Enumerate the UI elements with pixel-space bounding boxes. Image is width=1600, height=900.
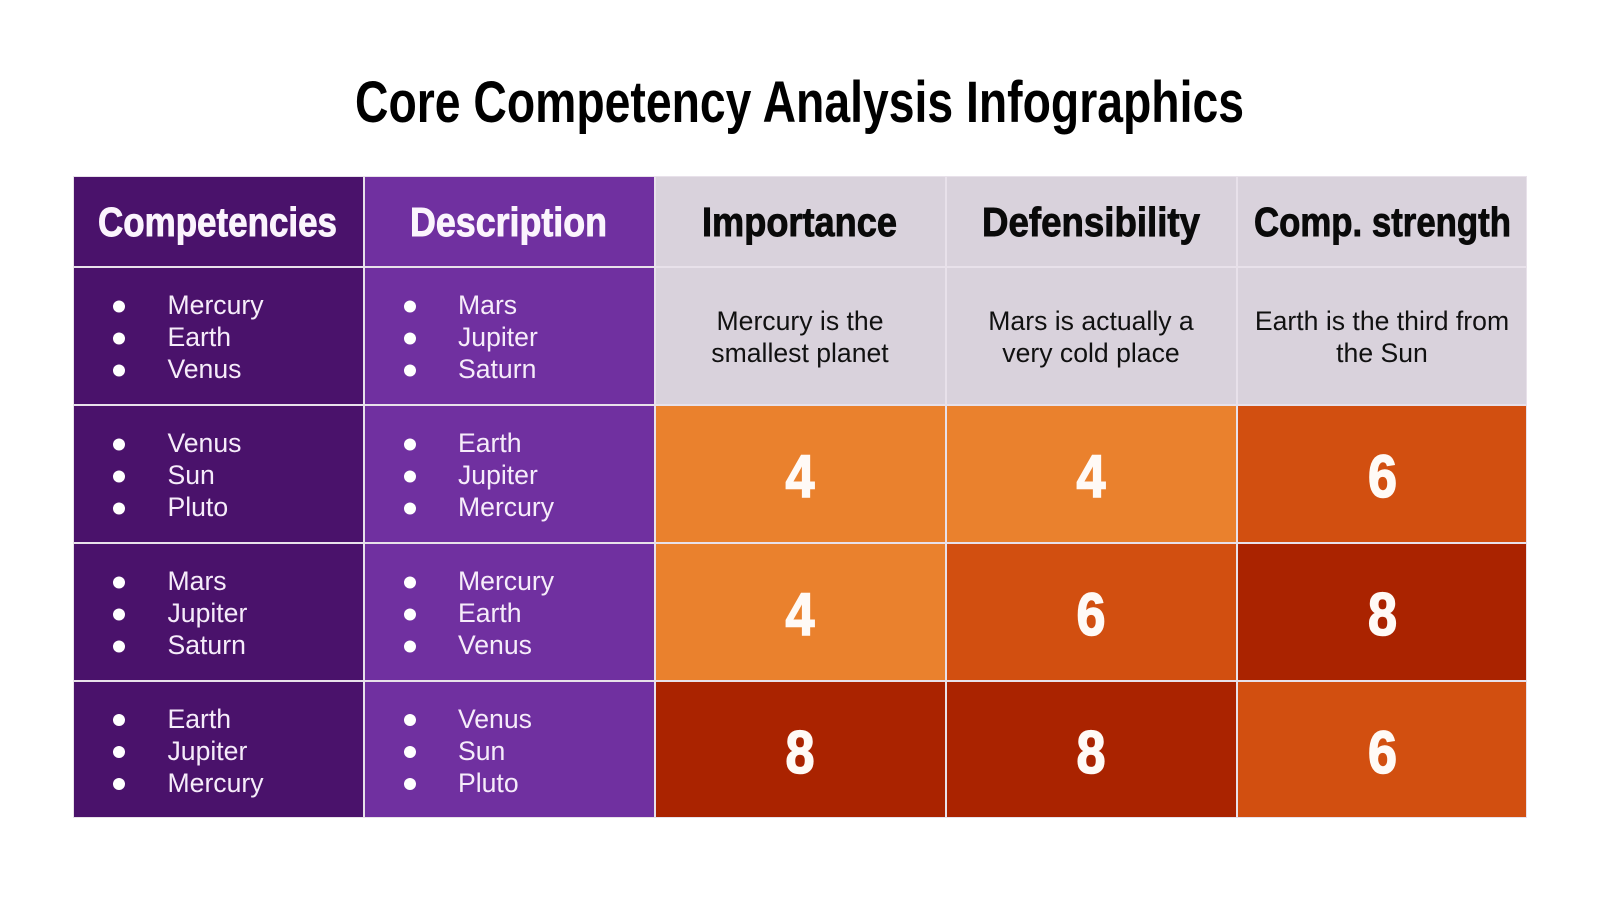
row 3 competencies list — [73, 543, 364, 681]
row 4 defensibility score — [946, 681, 1237, 818]
row 2 description list: Jupiter — [458, 460, 538, 490]
row 3 strength score — [1237, 543, 1527, 681]
row 4 importance score — [655, 681, 946, 818]
row 4 description list: Pluto — [458, 768, 519, 798]
row 1 strength text: Earth is the third from — [1255, 306, 1509, 336]
row 1 description list: Jupiter — [458, 322, 538, 352]
row 4 description list: Sun — [458, 736, 505, 766]
row 3 description list: Mercury — [458, 566, 555, 596]
row 4 description list — [364, 681, 655, 818]
row 3 competencies list: Mars — [168, 566, 227, 596]
row 3 importance score: 4 — [786, 581, 815, 648]
row 2 importance score: 4 — [786, 443, 815, 510]
row 1 importance text — [655, 267, 946, 405]
table — [72, 175, 1528, 819]
row 1 importance text: Mercury is the — [716, 306, 884, 336]
row 2 competencies list: Venus — [168, 428, 241, 458]
header: Comp. strength — [1237, 176, 1527, 267]
row 2 strength score — [1237, 405, 1527, 543]
title: Core Competency Analysis Infographics — [355, 70, 1244, 135]
row 1 description list — [364, 267, 655, 405]
row 3 defensibility score — [946, 543, 1237, 681]
row 4 strength score — [1237, 681, 1527, 818]
row 4 description list: Venus — [458, 704, 532, 734]
row 1 defensibility text: Mars is actually a — [988, 306, 1194, 336]
row 3 competencies list: Saturn — [168, 630, 246, 660]
row 1 strength text: the Sun — [1336, 338, 1428, 368]
header: Defensibility: Defensibility — [982, 199, 1200, 245]
row 4 defensibility score: 8 — [1076, 719, 1106, 786]
row 4 competencies list: Jupiter — [168, 736, 247, 766]
header: Comp. strength: Comp. strength — [1254, 199, 1511, 245]
header: Defensibility — [946, 176, 1237, 267]
row 4 competencies list: Mercury — [168, 768, 264, 798]
row 2 competencies list: Sun — [168, 460, 215, 490]
row 3 competencies list: Jupiter — [168, 598, 247, 628]
row 2 description list — [364, 405, 655, 543]
row 3 importance score — [655, 543, 946, 681]
row 3 description list: Earth — [458, 598, 522, 628]
row 2 description list: Mercury — [458, 492, 555, 522]
row 1 strength text — [1237, 267, 1527, 405]
row 2 defensibility score: 4 — [1076, 443, 1106, 510]
row 1 competencies list — [73, 267, 364, 405]
row 4 importance score: 8 — [786, 719, 814, 786]
row 2 importance score — [655, 405, 946, 543]
row 4 strength score: 6 — [1368, 719, 1397, 786]
header: Description: Description — [410, 199, 607, 245]
header: Description — [364, 176, 655, 267]
row 1 competencies list: Venus — [168, 354, 241, 384]
row 4 competencies list — [73, 681, 364, 818]
header: Importance: Importance — [702, 199, 897, 245]
row 4 competencies list: Earth — [168, 704, 231, 734]
row 3 description list: Venus — [458, 630, 532, 660]
row 2 defensibility score — [946, 405, 1237, 543]
row 1 competencies list: Mercury — [168, 290, 264, 320]
header: Importance — [655, 176, 946, 267]
row 1 description list: Saturn — [458, 354, 536, 384]
row 3 description list — [364, 543, 655, 681]
row 1 description list: Mars — [458, 290, 517, 320]
row 1 defensibility text: very cold place — [1002, 338, 1180, 368]
row 1 defensibility text — [946, 267, 1237, 405]
row 2 strength score: 6 — [1368, 443, 1397, 510]
row 3 strength score: 8 — [1368, 581, 1397, 648]
row 1 competencies list: Earth — [168, 322, 231, 352]
row 1 importance text: smallest planet — [711, 338, 889, 368]
row 3 defensibility score: 6 — [1076, 581, 1106, 648]
header: Competencies: Competencies — [98, 199, 337, 245]
row 2 competencies list — [73, 405, 364, 543]
row 2 competencies list: Pluto — [168, 492, 228, 522]
header: Competencies — [73, 176, 364, 267]
row 2 description list: Earth — [458, 428, 522, 458]
